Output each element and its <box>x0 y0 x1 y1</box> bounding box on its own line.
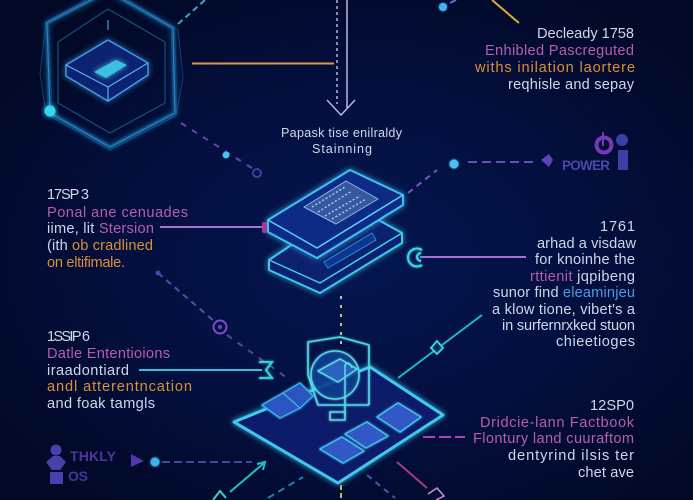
text block: top right: withs inilation laortere <box>474 60 635 76</box>
dotted connectors <box>156 0 535 500</box>
purple connector, lower right <box>423 436 465 438</box>
icon: stacked chip layers <box>268 170 403 293</box>
chip row: right <box>320 403 421 463</box>
text block: right middle: a klow tione, vibet's a <box>492 302 636 318</box>
icon: person badge <box>46 444 160 484</box>
text block: right middle: sunor find eleaminjeu <box>493 285 635 301</box>
icon: power node <box>541 132 628 173</box>
thkly label: THKLY <box>70 448 117 464</box>
power label: POWER <box>562 158 610 173</box>
text block: bottom right <box>473 398 635 481</box>
text block: right middle: 1761 <box>600 219 635 235</box>
text block: bottom right: Dridcie-lann Factbook <box>480 415 635 431</box>
icon: base platform with chips <box>234 337 443 483</box>
icon: hexagon with glowing box <box>40 0 183 150</box>
text: center caption: Stainning <box>312 142 372 156</box>
text block: right middle: arhad a visdaw <box>537 236 636 252</box>
text block: bottom right: dentyrind ilsis ter <box>508 448 634 464</box>
purple connector with node, right <box>408 248 526 266</box>
purple target ring <box>214 320 226 334</box>
text: center caption <box>281 126 403 156</box>
text: center caption: Papask tise enilraldy <box>281 126 403 140</box>
os label: OS <box>68 468 88 484</box>
cyan connector with arrow <box>139 362 272 378</box>
text block: step 3: 17SP 3 <box>47 187 89 203</box>
teal diamond node <box>431 341 443 354</box>
text block: right middle <box>492 219 636 350</box>
text block: right middle: chieetioges <box>556 334 635 350</box>
text block: bottom right: chet ave <box>578 465 634 481</box>
text block: top right: reqhisle and sepay <box>508 77 635 93</box>
text block: step 3: on eltifimale. <box>47 255 125 271</box>
text block: step 6: Datle Ententioions <box>47 346 170 362</box>
text block: bottom right: Flontury land cuuraftom <box>473 431 634 447</box>
text block: step 6: and foak tamgls <box>47 396 155 412</box>
orange connector line <box>192 62 334 64</box>
text block: right middle: for knoinhe the <box>535 252 635 268</box>
text block: bottom right: 12SP0 <box>590 398 634 414</box>
text block: top right: Enhibled Pascreguted <box>485 43 634 59</box>
text block: step 6 <box>47 329 192 412</box>
text block: step 6: iraadontiard <box>47 363 129 379</box>
chip row: left <box>262 383 313 418</box>
text block: right middle: in surfernrxked stuon <box>502 318 635 334</box>
yellow connector line <box>492 0 519 23</box>
text block: step 6: andl atterentncation <box>47 379 192 395</box>
text block: top right <box>474 26 635 93</box>
text block: step 6: 1SSIP 6 <box>47 329 90 345</box>
text block: top right: Decleady 1758 <box>537 26 634 42</box>
text block: step 3: Ponal ane cenuades <box>47 205 188 221</box>
purple connector with node, left <box>160 222 267 233</box>
text block: right middle: rttienit jqpibeng <box>530 269 635 285</box>
text block: step 3 <box>47 187 188 271</box>
pink line with glyph <box>397 462 444 500</box>
text block: step 3: iime, lit Stersion <box>47 221 154 237</box>
down arrow <box>327 0 355 115</box>
robot bracket <box>308 337 369 420</box>
teal arrow, lower left <box>213 462 265 500</box>
text block: step 3: (ith ob cradlined <box>47 238 153 254</box>
